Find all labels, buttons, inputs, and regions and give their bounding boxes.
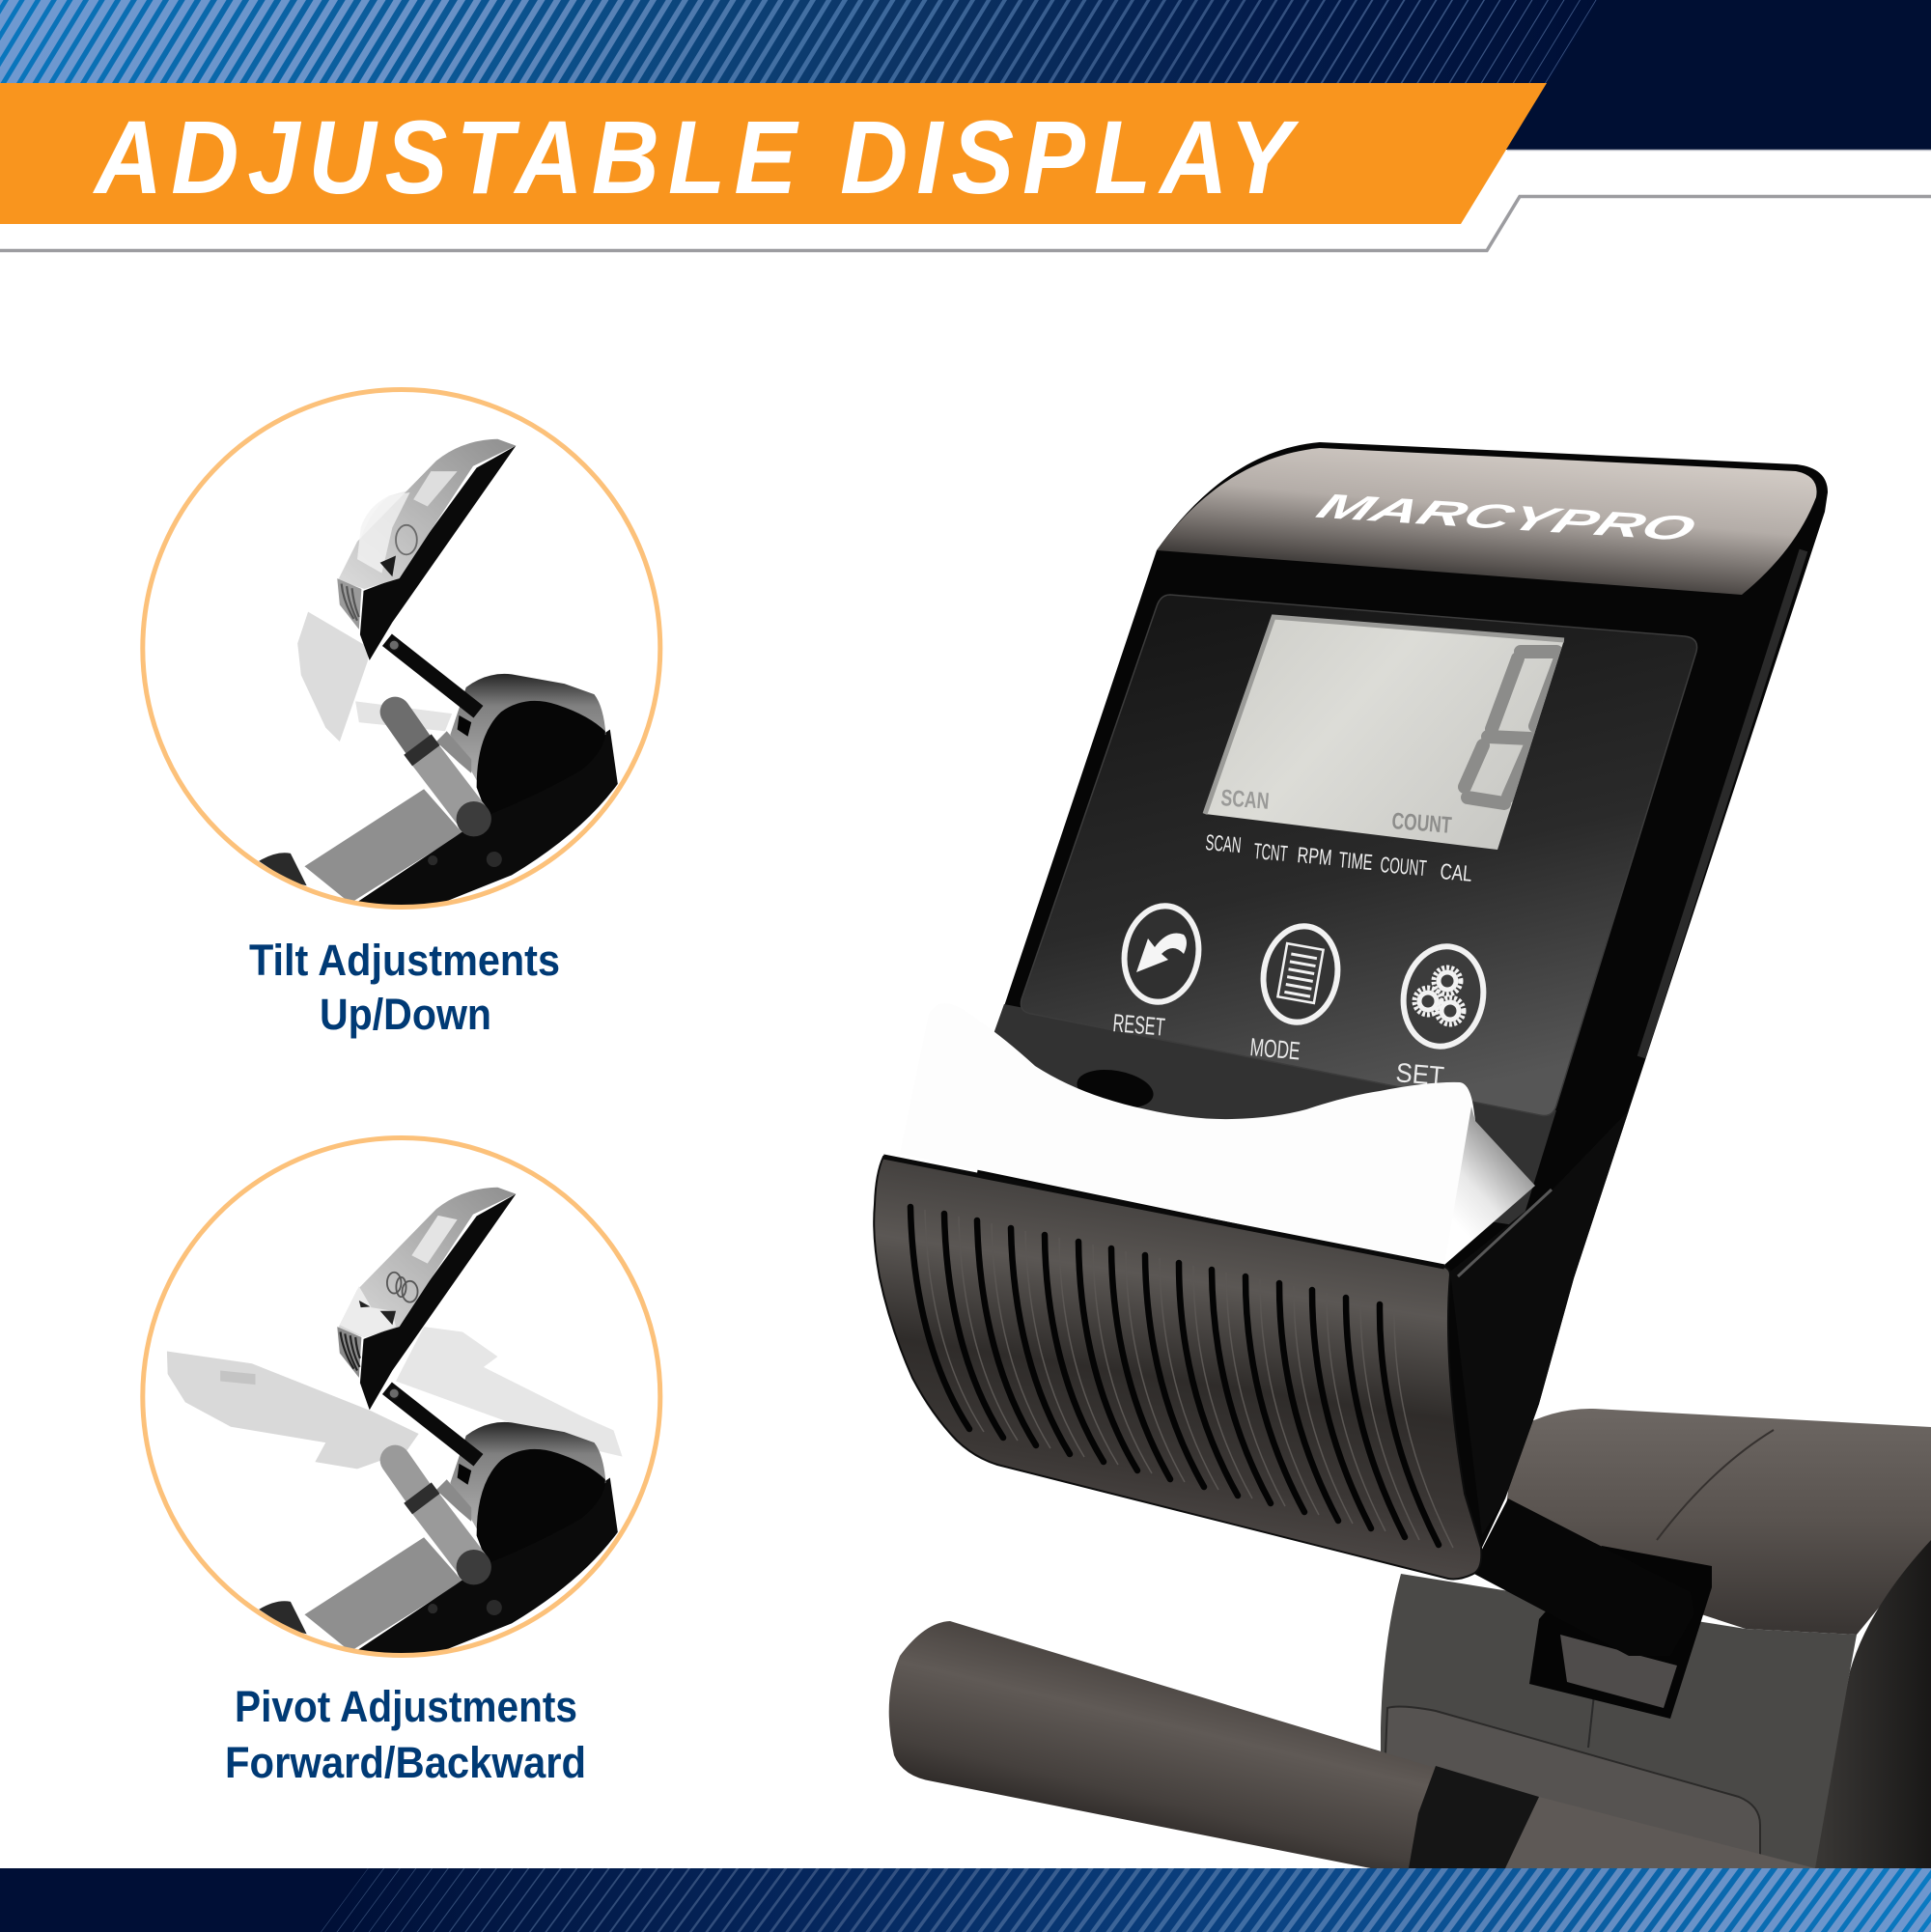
console face [338,1188,516,1337]
black lower housing [350,1477,618,1666]
ghost detail [220,1371,256,1385]
tilt product illustration [259,439,618,917]
grey stepped rule [0,197,1931,251]
base rail [304,789,462,903]
housing black cap [477,701,605,816]
caption line 2: Forward/Backward [225,1738,586,1787]
screen [411,1216,458,1264]
machine dome [1506,1409,1931,1635]
panel: main console photo [874,442,1931,1878]
caption line 1: Pivot Adjustments [235,1682,577,1731]
handle bar right part [1505,1797,1815,1868]
label COUNT: COUNT [1380,852,1428,881]
button rings [387,1273,418,1302]
console rear [360,446,516,660]
footer striped band [0,1868,1931,1932]
set ring [1396,940,1491,1052]
console body [966,442,1828,1572]
striped blue gradient band [0,0,1628,83]
hinge bracket [436,731,471,773]
ghost console right position [396,1327,623,1457]
roller upper section [395,1460,424,1501]
pivot screw [389,1388,400,1399]
set button [1394,940,1491,1091]
orange ring [143,390,660,908]
brand logo: MARCYPRO [1310,487,1702,547]
navy footer base [0,1868,1931,1932]
label TCNT: TCNT [1253,838,1289,866]
roller dark band [418,744,426,756]
label RPM: RPM [1297,842,1333,870]
console face [338,439,516,589]
grille ripples [342,584,359,621]
mounting holes [428,855,437,865]
ghost overlay on face [357,492,410,574]
roller end cap [457,1550,491,1584]
support rod [387,640,478,712]
pivot product illustration [167,1188,623,1666]
icon: gears [1414,967,1464,1024]
label TIME: TIME [1338,847,1374,875]
roller lower section [424,753,474,818]
LCD COUNT: COUNT [1391,808,1453,839]
LCD screen [1205,617,1564,850]
caption: tilt [249,936,560,1039]
hinge bracket [436,1479,471,1522]
dark right housing [1811,1540,1931,1868]
lower console strip [956,1004,1556,1226]
plate seam [1588,1694,1594,1748]
tray notch [380,555,396,576]
caption line 2: Up/Down [320,990,491,1039]
front plate [1381,1574,1857,1868]
grey hairline under navy [1507,149,1931,151]
mode label: MODE [1248,1032,1301,1066]
panel: pivot adjustment circle [143,1137,660,1666]
mounting holes [428,1604,437,1613]
orange title ribbon [0,83,1547,224]
console grille [337,578,361,630]
reset button [1111,900,1206,1042]
set label: SET [1394,1057,1445,1091]
panel: tilt adjustment circle [143,390,660,917]
caption line 1: Tilt Adjustments [249,936,560,985]
roller dark band [418,1493,426,1504]
buttons hint [396,525,417,554]
LCD SCAN: SCAN [1220,785,1270,815]
grille slots [910,1207,1439,1545]
grey housing side [450,674,605,780]
footer gradient and stripes [321,1868,1931,1932]
mode labels [1205,829,1473,886]
pivot screw [390,641,399,650]
hinge window [458,1464,471,1485]
seat foot [259,1601,307,1634]
console rear [360,1194,516,1410]
console grille [337,1327,361,1378]
label SCAN: SCAN [1205,829,1243,857]
grille slot highlights [925,1210,1453,1548]
reset label: RESET [1111,1008,1166,1042]
ghost console lower position [297,612,368,742]
inner pivot block [1560,1635,1677,1708]
caption: pivot [225,1682,586,1787]
handle bar [889,1621,1448,1878]
ghost arm [355,701,452,731]
roller upper section [395,712,424,753]
control panel [1021,595,1697,1116]
black lower housing [350,729,618,917]
tray white [340,1286,396,1337]
screen [413,471,458,507]
console slot [1074,1064,1157,1114]
tray notches [359,1301,370,1307]
grille ripples [341,1332,360,1371]
navy header block [0,0,1931,150]
lever rod [1470,1498,1694,1656]
strap [1409,1766,1539,1868]
ghost console upper position [390,490,406,496]
side gloss [1641,550,1804,1057]
label CAL: CAL [1440,858,1473,886]
LCD shadow edge [1205,617,1564,814]
reset ring [1117,900,1206,1008]
hinge window [458,715,471,737]
grille tray front [874,1157,1481,1579]
lower console wedge [1450,1110,1629,1535]
seat foot [259,853,307,885]
ghost console left position [167,1352,419,1469]
roller end cap [457,801,491,836]
mode button [1248,920,1345,1066]
housing black cap [477,1449,605,1564]
lower trim plate [1381,1707,1760,1868]
white area under navy [0,150,1931,249]
lever window [1529,1546,1712,1719]
shelf white back [900,1003,1475,1267]
header banner [0,0,1931,251]
tray top edge [883,1157,1444,1267]
icon: reset arrow [1136,934,1187,972]
dome seam [1657,1430,1774,1540]
top reflective plate [1157,448,1817,595]
grey housing side [450,1422,605,1528]
title: ADJUSTABLE DISPLAY [92,98,1300,215]
roller lower section [424,1501,474,1566]
orange ring [143,1137,660,1655]
support rod [387,1388,478,1460]
wedge edge highlight [1458,1190,1552,1276]
mode ring [1256,920,1345,1028]
icon: menu list [1277,943,1324,1003]
shelf side facet [1444,1106,1535,1265]
base rail [304,1537,462,1651]
seven segment digit [1465,652,1560,803]
